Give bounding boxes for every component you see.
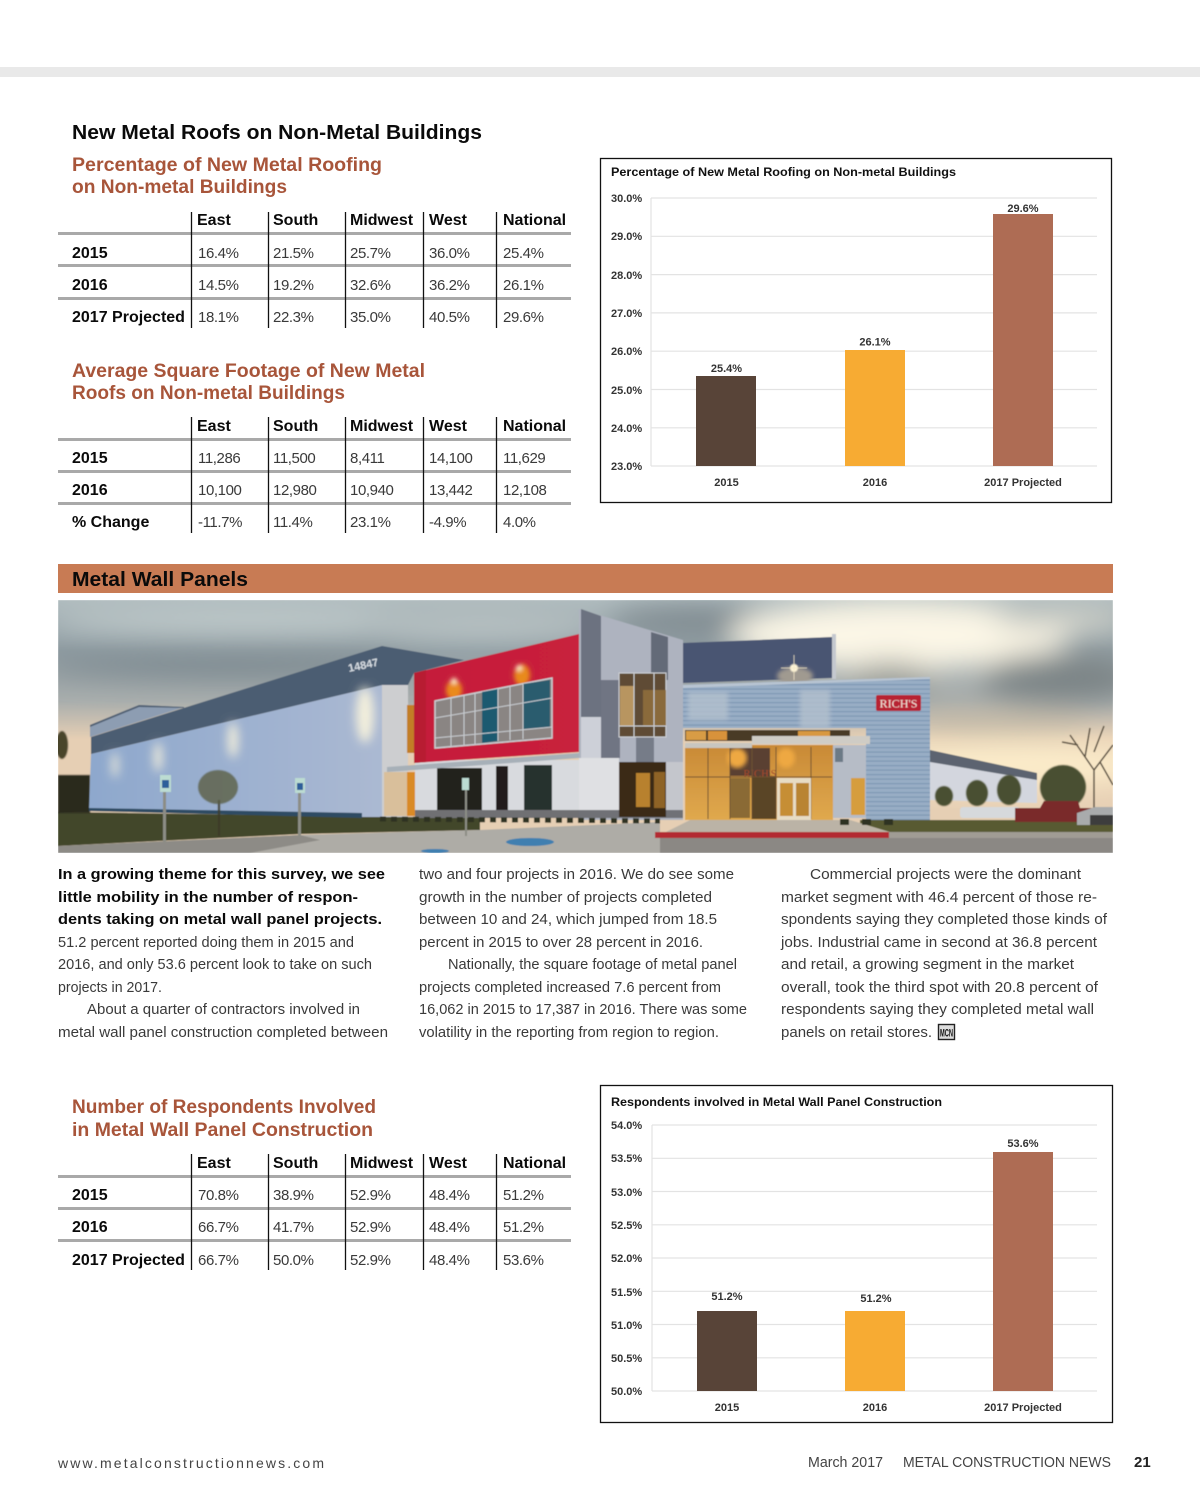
upper window strip xyxy=(685,730,850,741)
row percent change: 23.1% xyxy=(350,514,391,531)
long insulated metal wall xyxy=(89,685,382,817)
heading: percentage table: on Non-metal Buildings xyxy=(72,177,287,198)
article column 3: jobs. Industrial came in second at 36.8 percent xyxy=(780,935,1097,951)
table header: South xyxy=(273,212,318,229)
signs and posts xyxy=(160,775,469,842)
bar chart: percentage of new metal roofing xyxy=(600,158,1112,502)
table header: West xyxy=(429,1155,468,1172)
bar 2016: 26.1% xyxy=(859,336,891,348)
far building xyxy=(930,750,1037,803)
y axis labels: 51.5% xyxy=(611,1287,642,1299)
y axis labels: 53.0% xyxy=(611,1187,642,1199)
row percent change: 4.0% xyxy=(503,514,536,531)
row 2017 projected: 2017 Projected xyxy=(72,1252,185,1269)
footer: issue date and publication: March 2017 xyxy=(808,1455,883,1471)
heading: square footage table: Roofs on Non-metal Buildings xyxy=(72,383,345,404)
row 2017 projected: 53.6% xyxy=(503,1252,544,1269)
light wall and orange entry xyxy=(382,685,415,817)
row 2017 projected: 18.1% xyxy=(198,309,239,326)
number on fascia: 14847 xyxy=(347,657,380,675)
row 2016: 48.4% xyxy=(429,1219,470,1236)
bar 2016: 2016 xyxy=(863,1402,887,1414)
table: number of respondents xyxy=(58,1154,571,1270)
article column 1: metal wall panel construction completed between xyxy=(58,1025,388,1041)
red panel lights xyxy=(446,664,530,700)
article column 2: percent in 2015 to over 28 percent in 2016. xyxy=(419,935,703,951)
row 2016: 66.7% xyxy=(198,1219,239,1236)
bar 2015: 2015 xyxy=(715,1402,739,1414)
footer: page number: 21 xyxy=(1134,1454,1151,1471)
article column 2: growth in the number of projects completed xyxy=(419,890,712,906)
article column 3: market segment with 46.4 percent of those re- xyxy=(781,890,1097,906)
heading: respondents table: Number of Respondents Involved xyxy=(72,1097,376,1118)
article column 1 xyxy=(58,867,388,1041)
entry canopy xyxy=(685,736,870,748)
row 2015: 2015 xyxy=(72,245,108,262)
y axis labels: 23.0% xyxy=(611,461,642,473)
red RICH'S sign: RICH'S xyxy=(880,698,918,710)
table: percentage of new metal roofing xyxy=(58,212,571,328)
article column 1: 51.2 percent reported doing them in 2015 and xyxy=(58,935,354,951)
article column 2: two and four projects in 2016. We do see some xyxy=(419,867,734,883)
footer: issue date and publication xyxy=(808,1455,1111,1471)
row percent change: -11.7% xyxy=(198,514,242,531)
article column 1: 2016, and only 53.6 percent look to take on such xyxy=(58,957,372,973)
table header: National xyxy=(503,212,566,229)
row 2015: 51.2% xyxy=(503,1187,544,1204)
row percent change: 11.4% xyxy=(273,514,312,531)
table header xyxy=(197,418,566,435)
row 2016: 32.6% xyxy=(350,277,391,294)
wall base band xyxy=(89,808,362,818)
row 2015: 16.4% xyxy=(198,245,239,262)
row 2015: 2015 xyxy=(72,450,108,467)
y axis labels: 27.0% xyxy=(611,308,642,320)
table header: West xyxy=(429,418,468,435)
y axis labels: 25.0% xyxy=(611,385,642,397)
y axis labels: 52.5% xyxy=(611,1220,642,1232)
heading: square footage table xyxy=(72,361,425,404)
corrugated metal facade xyxy=(683,677,930,820)
bar 2017 projected xyxy=(984,203,1062,489)
article column 1: In a growing theme for this survey, we see xyxy=(58,867,385,883)
row 2016: 36.2% xyxy=(429,277,470,294)
row 2016: 12,108 xyxy=(503,482,547,499)
red panel window xyxy=(435,678,552,748)
row 2017 projected: 50.0% xyxy=(273,1252,314,1269)
article column 3: panels on retail stores. xyxy=(781,1025,932,1041)
facade reflections xyxy=(688,690,830,728)
row 2016: 52.9% xyxy=(350,1219,391,1236)
row 2016: 41.7% xyxy=(273,1219,314,1236)
article column 2: Nationally, the square footage of metal panel xyxy=(448,957,737,973)
tower windows xyxy=(619,673,666,817)
article column 2: volatility in the reporting from region to region. xyxy=(419,1025,719,1041)
row 2016: 13,442 xyxy=(429,482,473,499)
bar 2015 xyxy=(696,363,756,489)
distant trees xyxy=(935,765,1086,809)
side entrance box xyxy=(833,745,866,818)
glass entrance xyxy=(685,745,833,820)
row 2017 projected: 66.7% xyxy=(198,1252,239,1269)
article column 3 xyxy=(780,867,1108,1041)
row 2015 xyxy=(72,245,544,262)
row 2016: 12,980 xyxy=(273,482,317,499)
article column 1: About a quarter of contractors involved in xyxy=(87,1002,360,1018)
bar 2016: 51.2% xyxy=(860,1293,892,1305)
article column 2: between 10 and 24, which jumped from 18.5 xyxy=(419,912,717,928)
row 2016: 19.2% xyxy=(273,277,314,294)
article column 3: and retail, a growing segment in the market xyxy=(781,957,1074,973)
row 2015: 8,411 xyxy=(350,450,384,467)
bar 2017 projected: 2017 Projected xyxy=(984,1402,1062,1414)
row 2016: 2016 xyxy=(72,482,108,499)
red panel xyxy=(414,634,579,763)
tree at far left xyxy=(56,731,90,813)
bar 2015: 25.4% xyxy=(711,363,742,375)
row 2016: 10,940 xyxy=(350,482,394,499)
heading: respondents table xyxy=(72,1097,376,1141)
row percent change xyxy=(72,514,536,531)
section banner: metal wall panels: Metal Wall Panels xyxy=(72,569,248,591)
footer: website: www.metalconstructionnews.com xyxy=(57,1455,324,1471)
row 2017 projected: 52.9% xyxy=(350,1252,391,1269)
article column 2 xyxy=(419,867,747,1041)
bar 2017 projected: 29.6% xyxy=(1007,203,1039,215)
table header: South xyxy=(273,1155,318,1172)
bar 2016 xyxy=(845,1293,905,1414)
table header: East xyxy=(197,212,231,229)
photo: Rich's building at dusk xyxy=(40,599,1160,853)
row 2016: 2016 xyxy=(72,1219,108,1236)
row 2016 xyxy=(72,277,544,294)
section banner: metal wall panels xyxy=(58,564,1113,593)
dark upper wall with light xyxy=(683,634,836,685)
ground right and road xyxy=(58,820,1113,853)
table header xyxy=(197,1155,566,1172)
row 2015: 11,629 xyxy=(503,450,545,467)
y axis labels: 52.0% xyxy=(611,1253,642,1265)
bar chart: percentage of new metal roofing: Percentage of New Metal Roofing on Non-metal Buildings xyxy=(611,167,956,179)
parked cars xyxy=(960,801,1113,825)
y axis labels: 50.0% xyxy=(611,1386,642,1398)
row 2017 projected: 29.6% xyxy=(503,309,544,326)
y axis labels: 54.0% xyxy=(611,1120,642,1132)
row 2016 xyxy=(72,1219,544,1236)
low back block xyxy=(90,705,184,737)
row 2015: 14,100 xyxy=(429,450,473,467)
row 2015: 11,500 xyxy=(273,450,315,467)
wall lights xyxy=(112,687,374,778)
row 2015: 52.9% xyxy=(350,1187,391,1204)
y axis labels: 24.0% xyxy=(611,423,642,435)
y axis labels: 28.0% xyxy=(611,270,642,282)
bar 2015 xyxy=(697,1291,757,1414)
y axis labels: 50.5% xyxy=(611,1353,642,1365)
table header: East xyxy=(197,418,231,435)
row 2015: 2015 xyxy=(72,1187,108,1204)
table header: East xyxy=(197,1155,231,1172)
row 2015: 25.7% xyxy=(350,245,391,262)
row 2017 projected xyxy=(72,309,544,326)
row 2015: 38.9% xyxy=(273,1187,314,1204)
row 2016 xyxy=(72,482,547,499)
footer: issue date and publication: METAL CONSTRUCTION NEWS xyxy=(903,1455,1111,1471)
bar 2015: 51.2% xyxy=(711,1291,743,1303)
bar 2015: 2015 xyxy=(714,477,739,489)
table header: Midwest xyxy=(350,418,414,435)
glass entrance: RICH'S xyxy=(744,768,776,780)
row 2015: 21.5% xyxy=(273,245,314,262)
article column 2: 16,062 in 2015 to 17,387 in 2016. There was some xyxy=(419,1002,747,1018)
row 2015: 25.4% xyxy=(503,245,544,262)
y axis labels: 26.0% xyxy=(611,346,642,358)
row 2016: 10,100 xyxy=(198,482,242,499)
article column 2: projects completed increased 7.6 percent from xyxy=(419,980,721,996)
table header xyxy=(197,212,566,229)
bar 2016 xyxy=(845,336,905,489)
article column 1: projects in 2017. xyxy=(58,980,162,996)
canopy xyxy=(387,753,579,772)
y axis labels: 29.0% xyxy=(611,231,642,243)
row 2017 projected: 22.3% xyxy=(273,309,314,326)
y axis labels: 30.0% xyxy=(611,193,642,205)
heading: percentage table xyxy=(72,155,382,198)
article column 1: little mobility in the number of respon- xyxy=(58,890,358,906)
small tree xyxy=(198,770,238,836)
y axis labels: 53.5% xyxy=(611,1153,642,1165)
table header: National xyxy=(503,1155,566,1172)
article column 3: spondents saying they completed those kinds of xyxy=(781,912,1108,928)
row 2015: 70.8% xyxy=(198,1187,239,1204)
heading: percentage table: Percentage of New Metal Roofing xyxy=(72,155,382,176)
bar 2017 projected: 2017 Projected xyxy=(984,477,1062,489)
landscaping shrubs xyxy=(380,819,905,822)
heading: square footage table: Average Square Footage of New Metal xyxy=(72,361,425,382)
y axis labels xyxy=(611,193,642,473)
y axis labels: 51.0% xyxy=(611,1320,642,1332)
sky xyxy=(40,599,1160,853)
icon: MCN end mark xyxy=(938,1024,954,1040)
row 2016: 51.2% xyxy=(503,1219,544,1236)
row 2015 xyxy=(72,450,545,467)
y axis labels xyxy=(611,1120,642,1398)
row 2016: 2016 xyxy=(72,277,108,294)
row 2017 projected: 35.0% xyxy=(350,309,391,326)
row 2015: 11,286 xyxy=(198,450,240,467)
bare tree xyxy=(1062,726,1113,810)
bar chart: respondents involved in metal wall panel construction xyxy=(600,1086,1112,1422)
article column 1: dents taking on metal wall panel projects. xyxy=(58,912,382,928)
row 2016: 26.1% xyxy=(503,277,544,294)
table header: Midwest xyxy=(350,212,414,229)
row 2015: 48.4% xyxy=(429,1187,470,1204)
table: average square footage xyxy=(58,417,571,533)
row 2017 projected xyxy=(72,1252,544,1269)
title: New Metal Roofs on Non-Metal Buildings xyxy=(72,122,482,144)
ground floor wall with dark windows xyxy=(415,760,581,818)
article column 3: respondents saying they completed metal wall xyxy=(781,1002,1094,1018)
row 2017 projected: 2017 Projected xyxy=(72,309,185,326)
bar chart: respondents involved in metal wall panel construction: Respondents involved in Metal Wall Panel Construction xyxy=(611,1097,942,1109)
red RICH'S sign xyxy=(876,695,921,711)
ground left xyxy=(58,812,480,846)
grey tower panels xyxy=(579,609,683,820)
fascia panel xyxy=(91,646,464,754)
article column 3: overall, took the third spot with 20.8 percent of xyxy=(781,980,1099,996)
icon: MCN end mark: MCN xyxy=(940,1028,953,1040)
row 2015 xyxy=(72,1187,544,1204)
heading: respondents table: in Metal Wall Panel Construction xyxy=(72,1120,373,1141)
article column 3: Commercial projects were the dominant xyxy=(810,867,1081,883)
row 2017 projected: 40.5% xyxy=(429,309,470,326)
bar 2016: 2016 xyxy=(863,477,887,489)
row percent change: -4.9% xyxy=(429,514,466,531)
table header: West xyxy=(429,212,468,229)
bar 2017 projected xyxy=(984,1138,1062,1414)
row 2016: 14.5% xyxy=(198,277,239,294)
row 2017 projected: 48.4% xyxy=(429,1252,470,1269)
top page strip xyxy=(0,67,1200,77)
table header: Midwest xyxy=(350,1155,414,1172)
row 2015: 36.0% xyxy=(429,245,470,262)
bar 2017 projected: 53.6% xyxy=(1007,1138,1039,1150)
table header: National xyxy=(503,418,566,435)
table header: South xyxy=(273,418,318,435)
row percent change: % Change xyxy=(72,514,149,531)
